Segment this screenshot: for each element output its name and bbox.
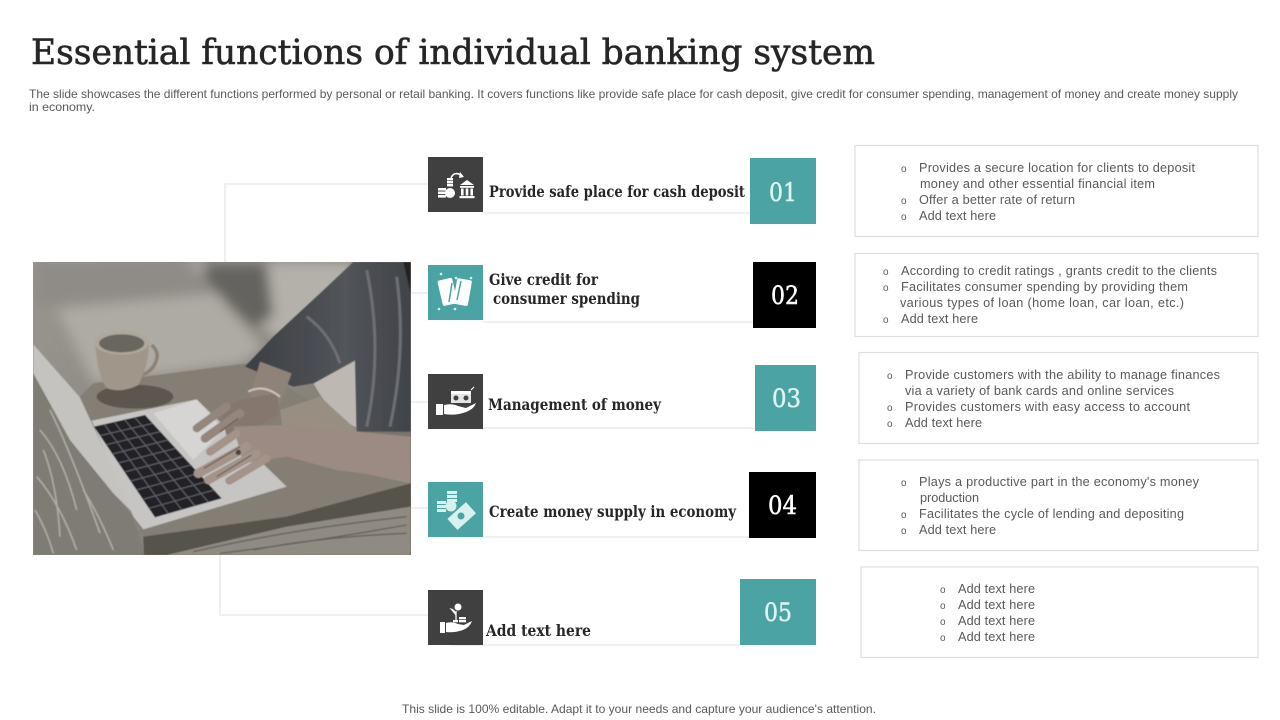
panel: add text placeholders: o xyxy=(940,601,946,612)
panel: add text placeholders: o xyxy=(940,633,946,644)
arms and hands xyxy=(251,361,292,404)
icon: hand holding banknote xyxy=(428,374,483,429)
panel: details for credit: Add text here xyxy=(901,312,978,326)
panel: add text placeholders xyxy=(861,567,1258,658)
label: Provide safe place for cash deposit xyxy=(489,182,746,201)
laptop base xyxy=(92,399,287,529)
mug xyxy=(140,345,157,375)
number badge 05 xyxy=(740,579,816,645)
panel: add text placeholders: Add text here xyxy=(958,598,1035,612)
label: Create money supply in economy xyxy=(489,502,737,521)
panel: details for cash deposit: o xyxy=(901,196,907,207)
title: Essential functions of individual banking system xyxy=(31,33,875,73)
panel: details for cash deposit: Offer a better rate of return xyxy=(919,193,1075,207)
number badge 03: 03 xyxy=(772,384,801,413)
panel: details for money management: o xyxy=(887,419,893,430)
icon: coins and banknote xyxy=(428,482,483,537)
label: consumer spending xyxy=(493,289,640,308)
label: Management of money xyxy=(488,395,662,414)
number badge 01 xyxy=(750,158,816,224)
panel: details for cash deposit: Add text here xyxy=(919,209,996,223)
row 4: money supply in economy xyxy=(428,472,816,538)
row 1: safe place for cash deposit xyxy=(428,157,816,224)
panel: details for cash deposit: o xyxy=(901,212,907,223)
row 2: credit for consumer spending xyxy=(428,262,816,328)
panel: add text placeholders: Add text here xyxy=(958,614,1035,628)
panel: add text placeholders: o xyxy=(940,585,946,596)
panel: details for money management: Provide customers with the ability to manage finances xyxy=(905,368,1220,382)
number badge 02 xyxy=(753,262,816,328)
photo: hands typing on a laptop xyxy=(33,262,411,555)
panel: details for credit xyxy=(855,254,1258,336)
panel: details for money management: Add text here xyxy=(905,416,982,430)
label: Add text here xyxy=(485,621,591,640)
number badge 01: 01 xyxy=(769,178,797,207)
label xyxy=(489,270,640,308)
number badge 03 xyxy=(755,365,816,431)
connector lines xyxy=(220,184,428,615)
icon: cards xyxy=(428,265,483,320)
panel: details for money supply: Facilitates the cycle of lending and depositing xyxy=(919,507,1184,521)
row 5: add text here xyxy=(428,579,816,645)
panel: details for money supply: production xyxy=(920,491,979,505)
panel: details for money supply: Add text here xyxy=(919,523,996,537)
panel: add text placeholders: Add text here xyxy=(958,582,1035,596)
number badge 05: 05 xyxy=(764,598,792,627)
panel: details for credit: o xyxy=(883,267,889,278)
row 3: management of money xyxy=(428,365,816,431)
panel: add text placeholders: Add text here xyxy=(958,630,1035,644)
panel: details for credit: Facilitates consumer spending by providing them xyxy=(901,280,1188,294)
description text: in economy. xyxy=(29,100,95,114)
icon: coins and bank xyxy=(428,157,483,212)
panel: details for money supply: o xyxy=(901,510,907,521)
panel: details for money management: o xyxy=(887,403,893,414)
number badge 02: 02 xyxy=(771,281,799,310)
panel: details for money management: via a variety of bank cards and online services xyxy=(905,384,1174,398)
panel: add text placeholders: o xyxy=(940,617,946,628)
panel: details for money management xyxy=(859,352,1258,444)
panel: details for money supply: o xyxy=(901,478,907,489)
panel: details for money supply xyxy=(859,460,1258,550)
icon: hand with plant and coins xyxy=(428,590,483,645)
panel: details for cash deposit xyxy=(855,146,1258,236)
description text: The slide showcases the different functions performed by personal or retail banking. It covers functions like provide safe place for cash deposit, give credit for consumer spending, management of money and create money supply xyxy=(29,87,1238,101)
panel: details for cash deposit: o xyxy=(901,164,907,175)
panel: details for credit: o xyxy=(883,315,889,326)
label: Give credit for xyxy=(489,270,599,289)
shirt and sleeve xyxy=(245,262,411,432)
keyboard xyxy=(94,415,222,517)
panel: details for money supply: Plays a productive part in the economy's money xyxy=(919,475,1200,489)
panel: details for cash deposit: money and other essential financial item xyxy=(920,177,1155,191)
panel: details for credit: According to credit ratings , grants credit to the clients xyxy=(901,264,1217,278)
number badge 04 xyxy=(749,472,816,538)
panel: details for money supply: o xyxy=(901,526,907,537)
panel: details for credit: various types of loan (home loan, car loan, etc.) xyxy=(900,296,1184,310)
panel: details for money management: o xyxy=(887,371,893,382)
panel: details for credit: o xyxy=(883,283,889,294)
number badge 04: 04 xyxy=(768,491,797,520)
panel: details for cash deposit: Provides a secure location for clients to deposit xyxy=(919,161,1195,175)
laptop lid xyxy=(33,344,135,515)
panel: details for money management: Provides customers with easy access to account xyxy=(905,400,1190,414)
description text xyxy=(29,87,1238,114)
footer note: This slide is 100% editable. Adapt it to your needs and capture your audience's attention. xyxy=(402,702,876,716)
